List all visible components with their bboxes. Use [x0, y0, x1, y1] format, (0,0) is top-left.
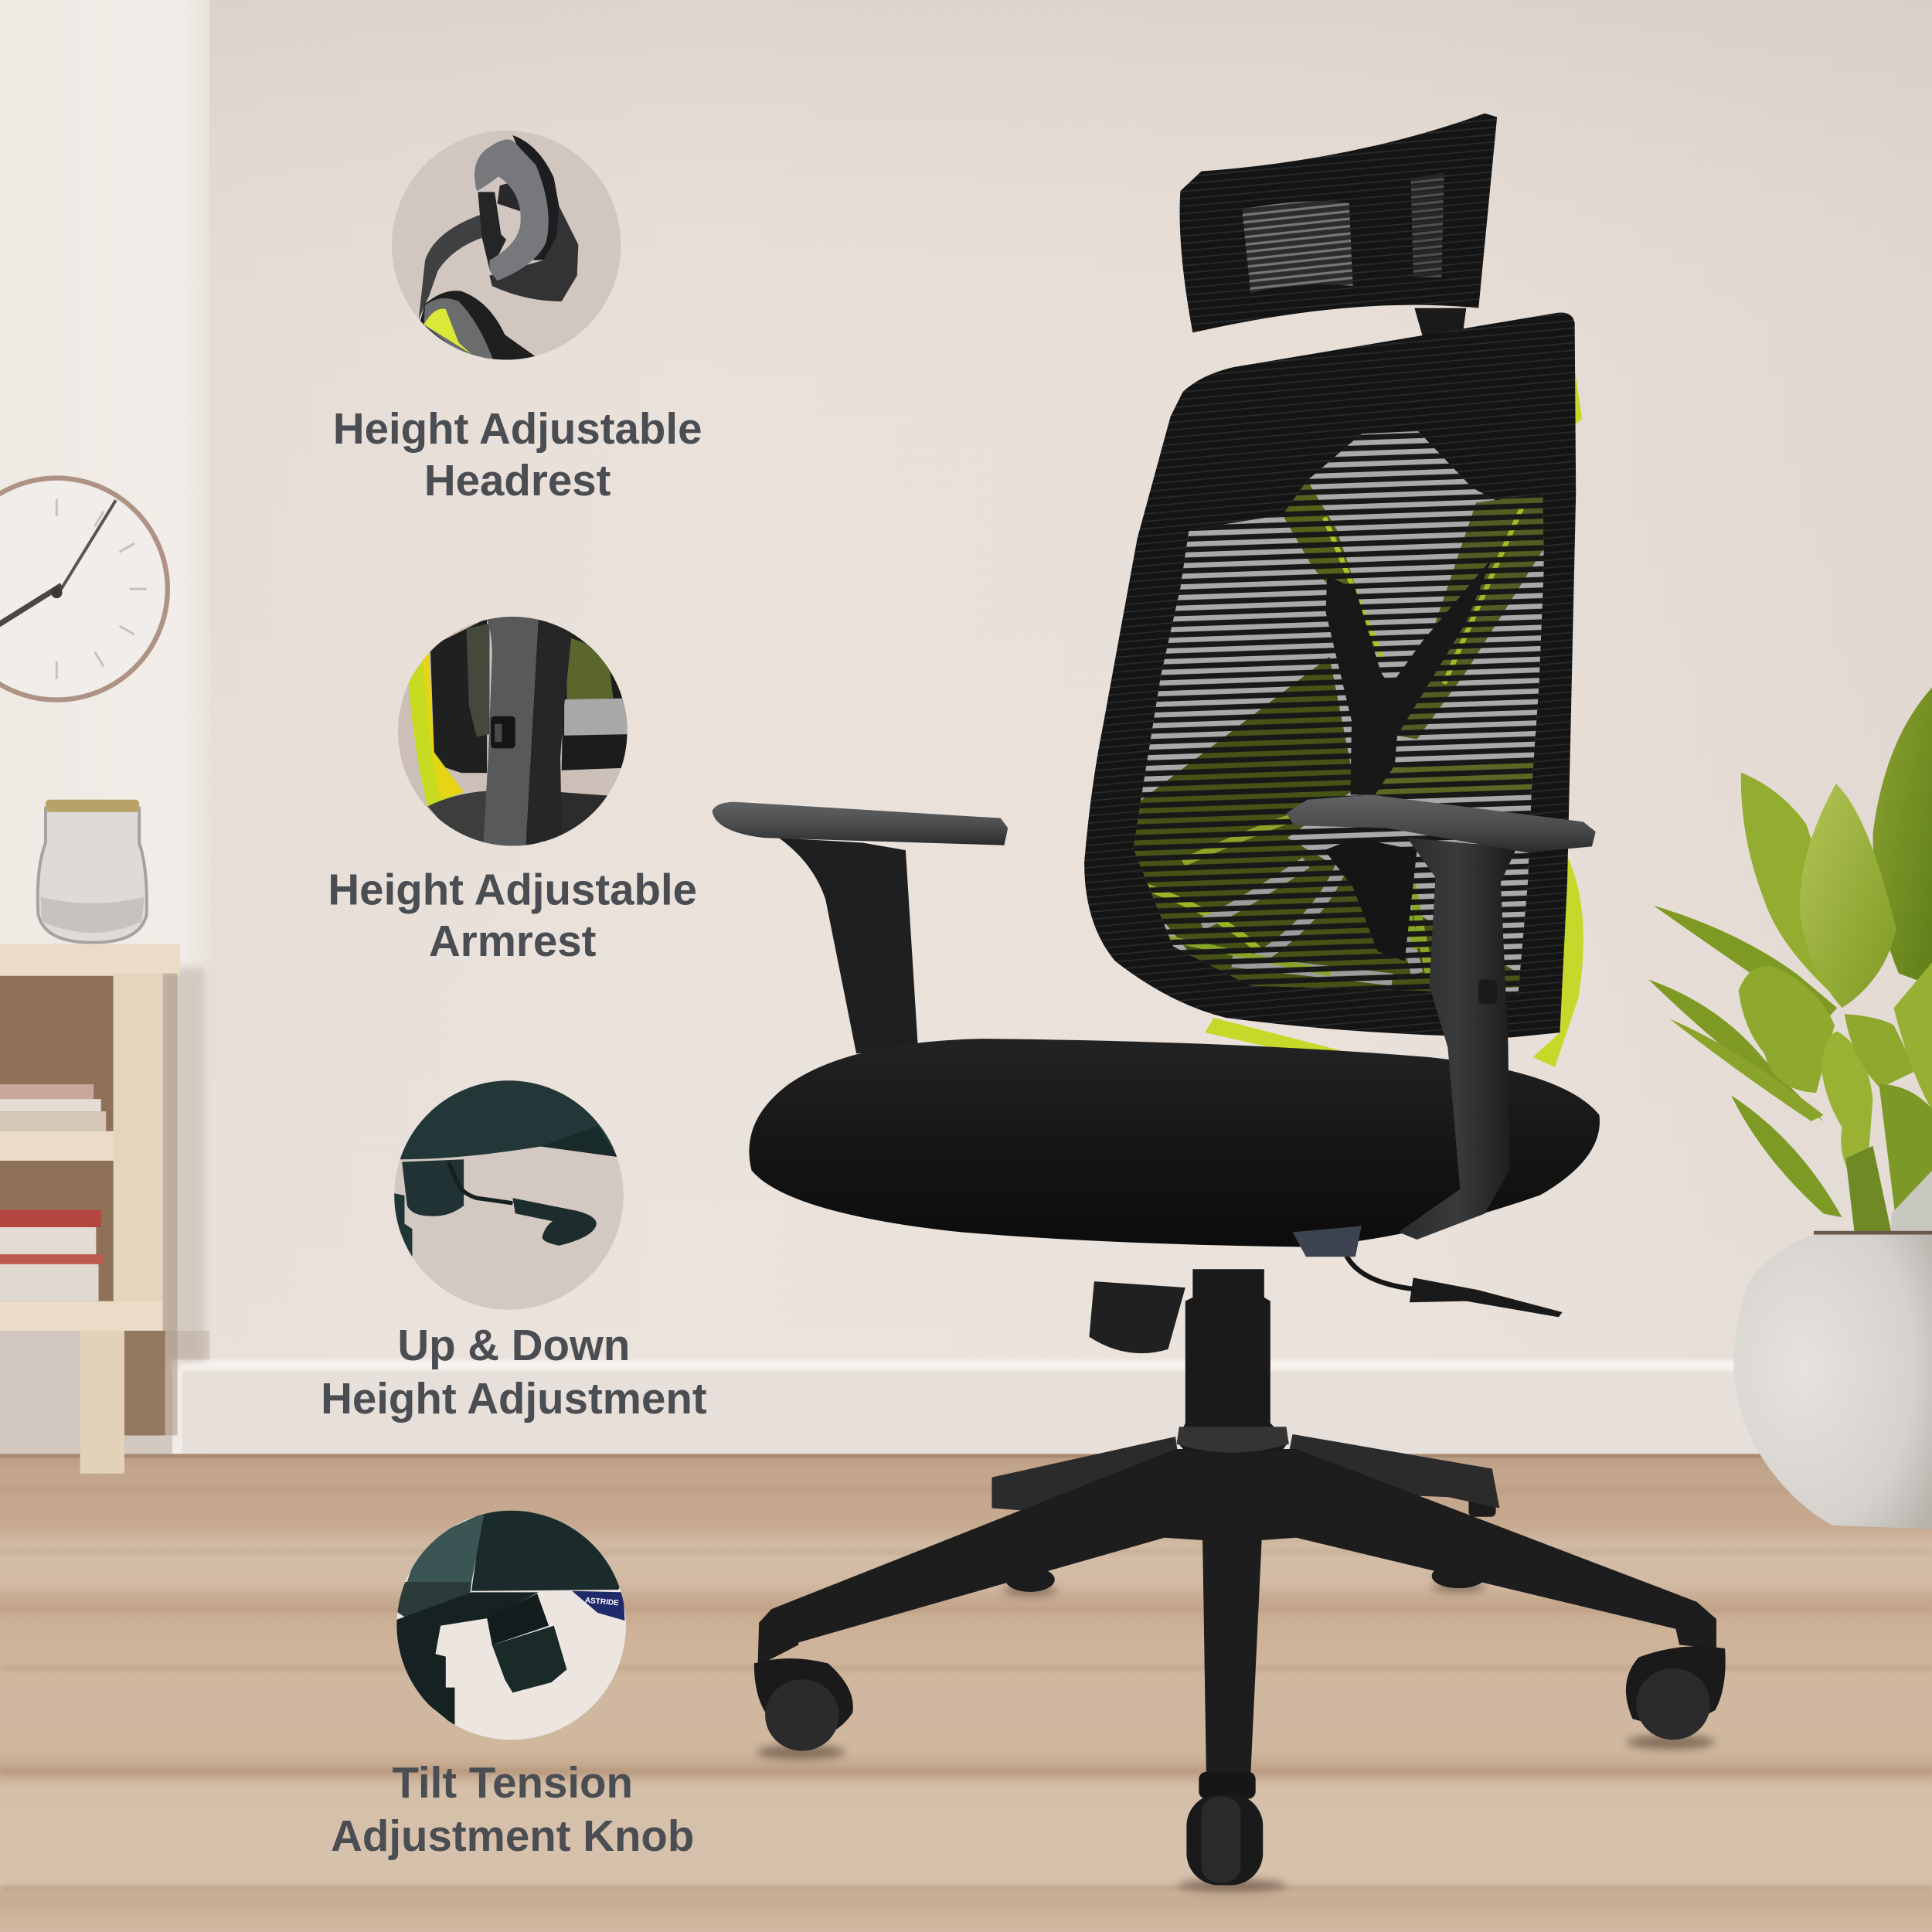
gas lift: [1177, 1269, 1289, 1453]
headrest: [1180, 114, 1497, 332]
front legs of star base: [758, 1449, 1716, 1774]
rear casters: [1005, 1497, 1496, 1592]
center caster: [1186, 1772, 1263, 1885]
feature label: headrest: Height Adjustable: [333, 404, 702, 453]
wooden floor: [0, 1454, 1932, 1932]
chair floor shadows: [757, 1582, 1715, 1891]
tilt knob: [1089, 1281, 1185, 1353]
headrest post: [1414, 308, 1466, 351]
lime support seen through mesh: [1115, 481, 1544, 1004]
office chair: [713, 114, 1726, 1885]
front right caster: [1626, 1646, 1726, 1740]
feature label: armrest: [328, 865, 697, 965]
feature label: height adjustment: Up & Down: [397, 1321, 630, 1369]
feature label: tilt knob: Adjustment Knob: [331, 1811, 694, 1860]
feature label: height adjustment: [321, 1321, 707, 1423]
feature label: armrest: Height Adjustable: [328, 865, 697, 913]
circle: height lever detail: [392, 1077, 624, 1310]
wall pillar: [0, 0, 209, 1454]
Y spine: [1326, 558, 1492, 794]
books: [0, 1084, 94, 1101]
right armrest: [1287, 794, 1596, 1240]
feature label: headrest: [333, 404, 702, 505]
glass jar: [38, 800, 147, 943]
left armrest: [713, 802, 1008, 1053]
feature label: armrest: Armrest: [429, 917, 597, 965]
baseboard: [172, 1360, 1774, 1454]
circle: headrest detail: [392, 131, 621, 363]
feature label: tilt knob: [331, 1758, 694, 1860]
feature label: headrest: Headrest: [424, 456, 611, 505]
pot: [1733, 1235, 1932, 1529]
potted plant: [1648, 688, 1932, 1529]
backrest: [1084, 312, 1576, 1037]
circle: tilt knob detail: [394, 1507, 626, 1740]
lime frame: [1205, 351, 1583, 1067]
front left caster: [754, 1658, 853, 1751]
lever: [1344, 1250, 1563, 1317]
rear legs of star base: [992, 1434, 1499, 1511]
lower Y spine: [1325, 838, 1417, 961]
wall clock: [0, 475, 170, 702]
seat label: [1293, 1226, 1362, 1257]
feature label: tilt knob: Tilt Tension: [393, 1758, 633, 1807]
leaves: [1872, 688, 1932, 986]
wooden shelf: [0, 944, 205, 1474]
seat cushion: [749, 1039, 1600, 1247]
feature label: height adjustment: Height Adjustment: [321, 1374, 707, 1423]
circle: armrest detail: [398, 616, 631, 848]
brand label: [572, 1591, 624, 1621]
brand label: ASTRIDE: [584, 1597, 619, 1607]
mesh panel: [1133, 431, 1544, 995]
